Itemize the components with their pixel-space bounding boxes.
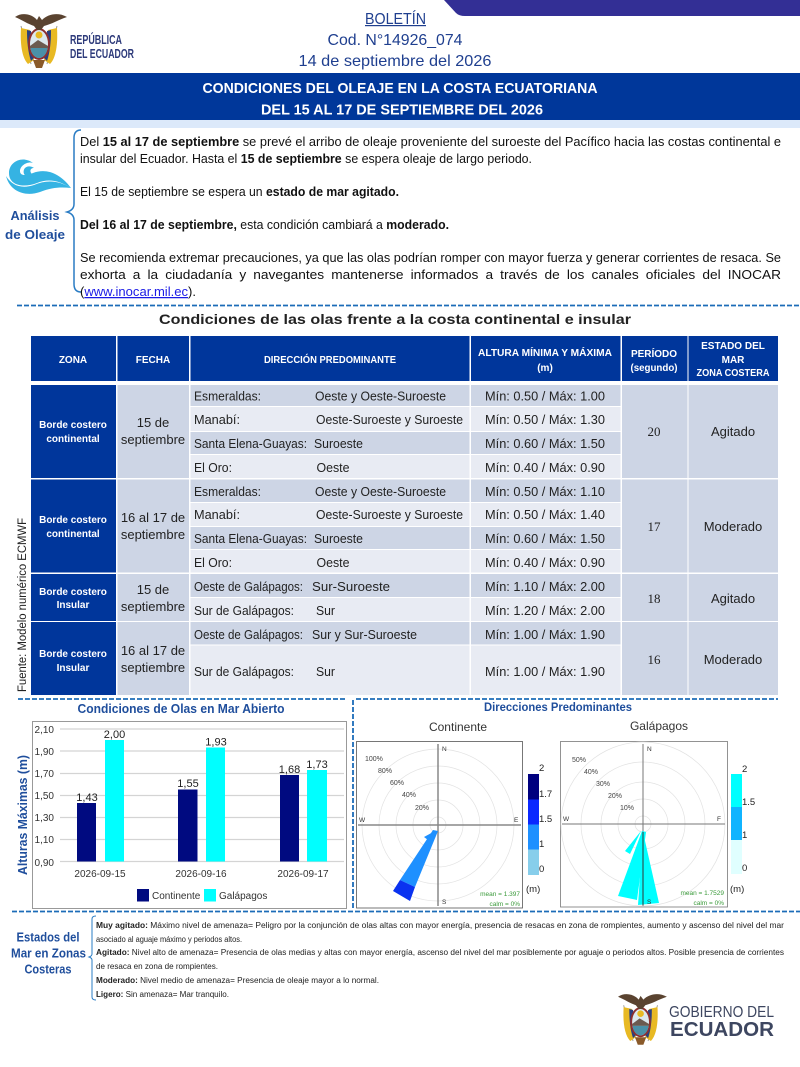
- wind rose: galápagos: W: [563, 816, 570, 823]
- bulletin heading: 14 de septiembre del 2026: [298, 53, 492, 70]
- icon: wave: [6, 160, 71, 194]
- table header row: (segundo): [630, 363, 678, 374]
- title banner: DEL 15 AL 17 DE SEPTIEMBRE DEL 2026: [261, 102, 543, 118]
- table header row: FECHA: [136, 355, 170, 366]
- chart heading: Condiciones de Olas en Mar Abierto: [78, 702, 285, 716]
- direction and height rows: Santa Elena-Guayas:: [194, 531, 307, 546]
- direction and height rows: Mín: 1.10 / Máx: 2.00: [485, 579, 605, 594]
- text block: sea states: Ligero: Sin amenaza= Mar tranquilo.: [96, 990, 229, 999]
- period and sea state cells: Moderado: [704, 652, 762, 667]
- text block: sea states: asociado al aguaje máximo y periodos altos.: [96, 935, 242, 944]
- wind rose: galápagos: calm = 0%: [693, 900, 724, 907]
- bar chart: maximum heights: 2,10: [35, 725, 54, 736]
- direction and height rows: Oeste de Galápagos:: [194, 627, 303, 642]
- logo: Gobierno del Ecuador: GOBIERNO DEL: [669, 1004, 774, 1021]
- wind rose: continente: 60%: [390, 780, 404, 787]
- zone and date cells: continental: [46, 529, 100, 540]
- text block: analysis: Del 16 al 17 de septiembre, esta condición cambiará a moderado.: [80, 218, 449, 232]
- bar chart: maximum heights: 2026-09-15: [74, 869, 126, 880]
- label: estados del mar: [11, 930, 86, 976]
- label: análisis de oleaje: Análisis: [10, 208, 60, 223]
- bar chart: maximum heights: Galápagos: [219, 891, 267, 902]
- logo: Gobierno del Ecuador: [618, 994, 775, 1045]
- table header row: PERÍODO: [631, 347, 677, 360]
- zone and date cells: Insular: [57, 663, 89, 674]
- wind rose: galápagos: 1: [742, 830, 747, 841]
- direction and height rows: Oeste de Galápagos:: [194, 579, 303, 594]
- wind rose: galápagos: 30%: [596, 781, 610, 788]
- direction and height rows: Oeste-Suroeste y Suroeste: [316, 412, 463, 427]
- direction and height rows: Manabí:: [194, 412, 240, 427]
- direction and height rows: Oeste: [316, 460, 350, 475]
- bar chart: maximum heights: 1,10: [35, 835, 54, 846]
- bar chart: maximum heights: 0,90: [35, 858, 54, 869]
- wind rose: galápagos: 1.5: [742, 797, 755, 808]
- zone and date cells: Borde costero: [39, 649, 107, 660]
- zone and date cells: septiembre: [121, 527, 185, 542]
- brace: análisis: [67, 130, 81, 292]
- wind rose: galápagos: 40%: [584, 769, 598, 776]
- period and sea state cells: 17: [648, 519, 661, 534]
- bar chart: maximum heights: 1,90: [35, 747, 54, 758]
- direction and height rows: Mín: 0.50 / Máx: 1.40: [485, 507, 605, 522]
- text block: analysis: (www.inocar.mil.ec ).: [80, 285, 196, 299]
- wind rose: continente: [356, 720, 552, 908]
- logo: Gobierno del Ecuador: ECUADOR: [670, 1019, 775, 1041]
- bar chart: maximum heights: 2,00: [104, 729, 125, 741]
- logo: República del Ecuador: [15, 14, 134, 68]
- wind rose: galápagos: 10%: [620, 805, 634, 812]
- bar chart: maximum heights: 1,50: [35, 791, 54, 802]
- wind rose: continente: 2: [539, 763, 544, 774]
- direction and height rows: El Oro:: [194, 460, 232, 475]
- direction and height rows: Mín: 0.40 / Máx: 0.90: [485, 460, 605, 475]
- text block: sea states: Muy agitado: Máximo nivel de amenaza= Peligro por la conjunción de olas altas con mayor energía, presencia de resacas en zona de rompientes, aumento y ascenso del nivel del mar: [96, 921, 784, 930]
- bar chart: maximum heights: 1,93: [205, 736, 227, 748]
- bar chart: maximum heights: Continente: [152, 891, 201, 902]
- wind rose: galápagos: [560, 719, 755, 907]
- text block: analysis: El 15 de septiembre se espera un estado de mar agitado.: [80, 185, 399, 199]
- wind rose: galápagos: 2: [742, 764, 747, 775]
- table header row: ALTURA MÍNIMA Y MÁXIMA: [478, 346, 612, 359]
- label: análisis de oleaje: de Oleaje: [5, 227, 65, 242]
- label: estados del mar: Estados del: [16, 930, 80, 944]
- zone and date cells: septiembre: [121, 432, 185, 447]
- text block: analysis: Se recomienda extremar precauciones, ya que las olas podrían romper con mayor fuerza y generar corrientes de resaca. Se: [80, 251, 781, 265]
- wind rose: continente: Continente: [429, 720, 487, 734]
- zone and date cells: 15 de: [137, 582, 169, 597]
- bar chart: maximum heights: 1,68: [279, 764, 300, 776]
- period and sea state cells: Moderado: [704, 519, 762, 534]
- bar chart: maximum heights: 1,70: [35, 769, 54, 780]
- text block: analysis: insular del Ecuador. Hasta el 15 de septiembre se espera oleaje de largo periodo.: [80, 152, 532, 166]
- wind rose: continente: N: [442, 746, 447, 753]
- title banner: [0, 73, 800, 128]
- table header row: ZONA: [59, 355, 87, 366]
- title banner: CONDICIONES DEL OLEAJE EN LA COSTA ECUATORIANA: [202, 80, 598, 97]
- wind rose: continente: mean = 1.397: [480, 891, 520, 898]
- wind rose: galápagos: F: [717, 816, 721, 823]
- direction and height rows: Sur y Sur-Suroeste: [312, 627, 417, 642]
- direction and height rows: Mín: 0.50 / Máx: 1.30: [485, 412, 605, 427]
- direction and height rows: Santa Elena-Guayas:: [194, 436, 307, 451]
- bar chart: maximum heights: [32, 722, 346, 908]
- direction and height rows: El Oro:: [194, 555, 232, 570]
- table header row: ZONA COSTERA: [696, 368, 770, 379]
- zone and date cells: 16 al 17 de: [121, 643, 185, 658]
- label: análisis de oleaje: [5, 208, 65, 242]
- wind rose: continente: 40%: [402, 792, 416, 799]
- wind rose: continente: 0: [539, 864, 544, 875]
- direction and height rows: Mín: 0.60 / Máx: 1.50: [485, 531, 605, 546]
- direction and height rows: Sur-Suroeste: [312, 579, 390, 594]
- zone and date cells: [31, 385, 189, 695]
- period and sea state cells: 20: [648, 424, 660, 439]
- text block: sea states: [96, 921, 784, 999]
- direction and height rows: Suroeste: [314, 531, 363, 546]
- decorative top-right band: [444, 0, 800, 16]
- period and sea state cells: [622, 385, 778, 695]
- zone and date cells: Borde costero: [39, 420, 107, 431]
- wind rose: galápagos: 0: [742, 863, 747, 874]
- direction and height rows: Oeste-Suroeste y Suroeste: [316, 507, 463, 522]
- zone and date cells: 16 al 17 de: [121, 510, 185, 525]
- table header row: ESTADO DEL: [701, 341, 765, 352]
- wind rose: continente: E: [514, 817, 519, 824]
- text block: analysis: exhorta a la ciudadanía y navegantes mantenerse informados a través de los canales oficiales del INOCAR: [80, 268, 781, 282]
- direction and height rows: Mín: 0.50 / Máx: 1.10: [485, 484, 605, 499]
- wind rose: continente: S: [442, 899, 447, 906]
- brace: estados: [89, 916, 96, 1000]
- wind rose: galápagos: 20%: [608, 793, 622, 800]
- bar chart: maximum heights: 1,30: [35, 813, 54, 824]
- bar chart: maximum heights: 2026-09-17: [277, 869, 329, 880]
- zone and date cells: continental: [46, 434, 100, 445]
- period and sea state cells: Agitado: [711, 591, 755, 606]
- zone and date cells: Borde costero: [39, 587, 107, 598]
- bar chart: maximum heights: 2026-09-16: [175, 869, 227, 880]
- zone and date cells: Insular: [57, 600, 89, 611]
- label: estados del mar: Mar en Zonas: [11, 946, 86, 960]
- direction and height rows: Esmeraldas:: [194, 484, 261, 499]
- logo: República del Ecuador: REPÚBLICA: [70, 32, 122, 47]
- wind rose: galápagos: S: [647, 899, 652, 906]
- zone and date cells: septiembre: [121, 599, 185, 614]
- text block: sea states: Agitado: Nivel alto de amenaza= Presencia de olas medias y altas con mayor energía, ascenso del nivel del mar posiblemente por aguaje o periodos altos. Posible presencia de corrientes: [96, 948, 784, 957]
- direction and height rows: Mín: 0.50 / Máx: 1.00: [485, 388, 605, 404]
- zone and date cells: 15 de: [137, 415, 169, 430]
- table header row: DIRECCIÓN PREDOMINANTE: [264, 353, 396, 366]
- wind rose: galápagos: (m): [730, 884, 744, 895]
- period and sea state cells: 18: [648, 591, 660, 606]
- direction and height rows: Oeste: [316, 555, 350, 570]
- bar chart: maximum heights: 1,55: [177, 778, 199, 790]
- source note: Fuente: Modelo numérico ECMWF: [17, 518, 29, 692]
- table header row: MAR: [722, 355, 745, 366]
- direction and height rows: Mín: 0.60 / Máx: 1.50: [485, 436, 605, 451]
- wind rose: continente: 80%: [378, 768, 392, 775]
- bulletin heading: [298, 9, 492, 70]
- direction and height rows: Oeste y Oeste-Suroeste: [315, 388, 446, 404]
- zone and date cells: septiembre: [121, 660, 185, 675]
- direction and height rows: Esmeraldas:: [194, 388, 261, 404]
- table: [31, 336, 778, 695]
- table header row: [31, 336, 778, 381]
- direction and height rows: Sur de Galápagos:: [194, 664, 294, 679]
- direction and height rows: Manabí:: [194, 507, 240, 522]
- period and sea state cells: 16: [648, 652, 661, 667]
- direction and height rows: Mín: 1.00 / Máx: 1.90: [485, 664, 605, 679]
- direction and height rows: Oeste y Oeste-Suroeste: [315, 484, 446, 499]
- direction and height rows: Sur: [316, 603, 336, 618]
- chart y-axis label: Alturas Máximas (m): [15, 755, 30, 875]
- text block: analysis: Del 15 al 17 de septiembre se prevé el arribo de oleaje proveniente del suroeste del Pacífico hacia las costas continental e: [80, 135, 781, 149]
- wind rose: galápagos: 50%: [572, 757, 586, 764]
- wind rose: continente: 1: [539, 839, 544, 850]
- wind rose: continente: calm = 0%: [489, 901, 520, 908]
- table header row: (m): [537, 363, 553, 374]
- table heading: Condiciones de las olas frente a la costa continental e insular: [159, 311, 632, 327]
- direction and height rows: Suroeste: [314, 436, 363, 451]
- period and sea state cells: Agitado: [711, 424, 755, 439]
- wind rose: continente: W: [359, 817, 366, 824]
- text block: sea states: Moderado: Nivel medio de amenaza= Presencia de oleaje mayor a lo normal.: [96, 976, 379, 985]
- wind rose: galápagos: mean = 1.7529: [680, 890, 724, 897]
- wind rose: galápagos: N: [647, 746, 652, 753]
- text block: analysis: [80, 135, 781, 299]
- direction and height rows: Mín: 0.40 / Máx: 0.90: [485, 555, 605, 570]
- direction and height rows: Mín: 1.00 / Máx: 1.90: [485, 627, 605, 642]
- direction and height rows: Mín: 1.20 / Máx: 2.00: [485, 603, 605, 618]
- wind rose: continente: 1.5: [539, 814, 552, 825]
- direction and height rows: [190, 385, 620, 695]
- wind rose: continente: 100%: [365, 756, 383, 763]
- bar chart: maximum heights: 1,43: [76, 792, 98, 804]
- logo: República del Ecuador: DEL ECUADOR: [70, 46, 134, 61]
- bar chart: maximum heights: 1,73: [306, 759, 328, 771]
- wind rose: continente: 20%: [415, 805, 429, 812]
- wind rose: continente: (m): [526, 884, 540, 895]
- wind rose: continente: 1.7: [539, 789, 552, 800]
- zone and date cells: Borde costero: [39, 515, 107, 526]
- direction and height rows: Sur de Galápagos:: [194, 603, 294, 618]
- wind rose: galápagos: Galápagos: [630, 719, 688, 733]
- bulletin heading: BOLETÍN: [365, 9, 426, 28]
- roses heading: Direcciones Predominantes: [484, 700, 632, 714]
- text block: sea states: de resaca en zona de rompientes.: [96, 962, 218, 971]
- direction and height rows: Sur: [316, 664, 336, 679]
- label: estados del mar: Costeras: [24, 962, 72, 976]
- bulletin heading: Cod. N°14926_074: [328, 32, 463, 49]
